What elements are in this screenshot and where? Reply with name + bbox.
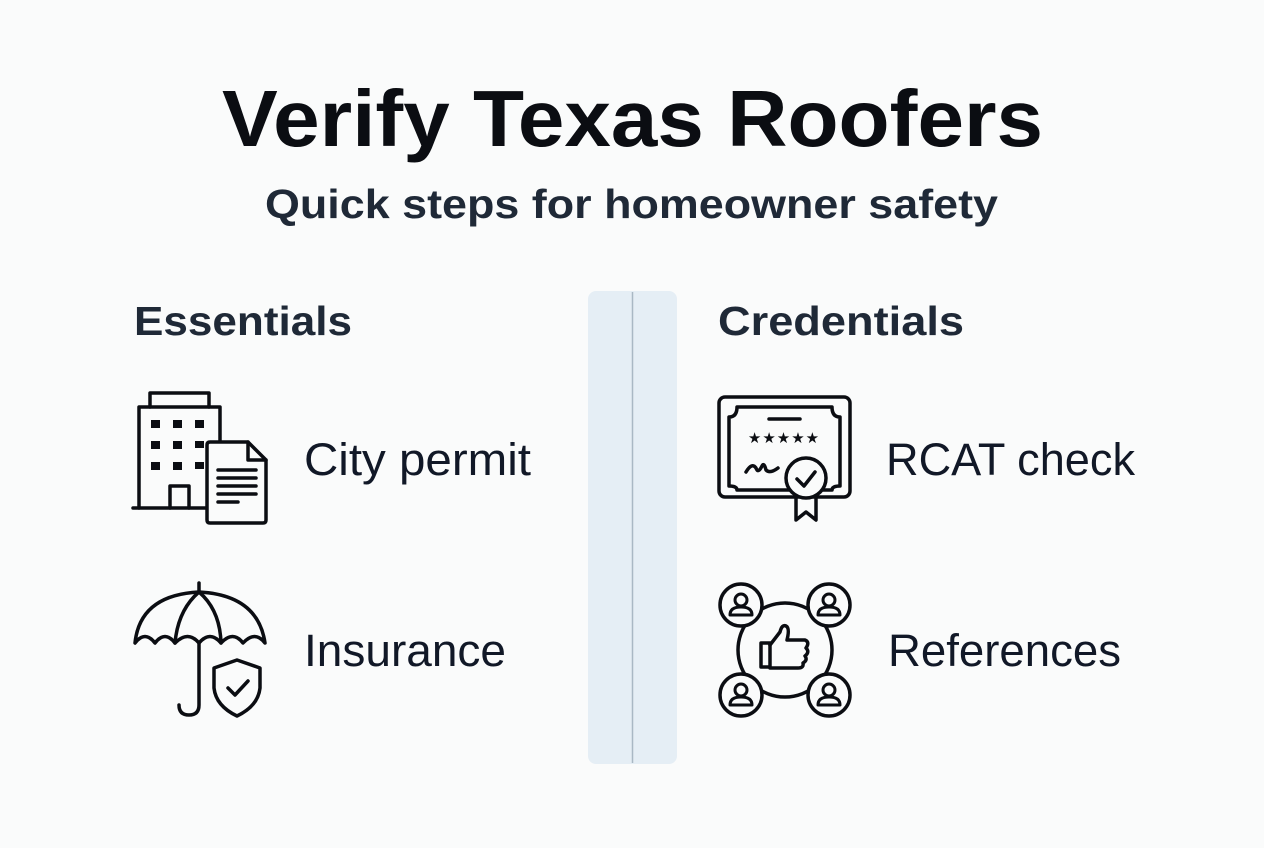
- title: Verify Texas Roofers: [222, 74, 1043, 163]
- label: References: References: [888, 625, 1121, 676]
- icon: certificate: [719, 397, 850, 520]
- label: City permit: City permit: [304, 434, 532, 485]
- subtitle: Quick steps for homeowner safety: [265, 181, 998, 227]
- label: RCAT check: RCAT check: [886, 434, 1135, 485]
- heading: Credentials: Credentials: [718, 298, 964, 344]
- icon: references network: [720, 584, 850, 716]
- icon: building with permit: [133, 393, 266, 523]
- icon: certificate: ★★★★★: [748, 430, 820, 447]
- heading: Essentials: Essentials: [134, 298, 352, 344]
- label: Insurance: Insurance: [304, 625, 506, 676]
- divider: [588, 291, 677, 764]
- icon: umbrella with shield: [135, 583, 265, 716]
